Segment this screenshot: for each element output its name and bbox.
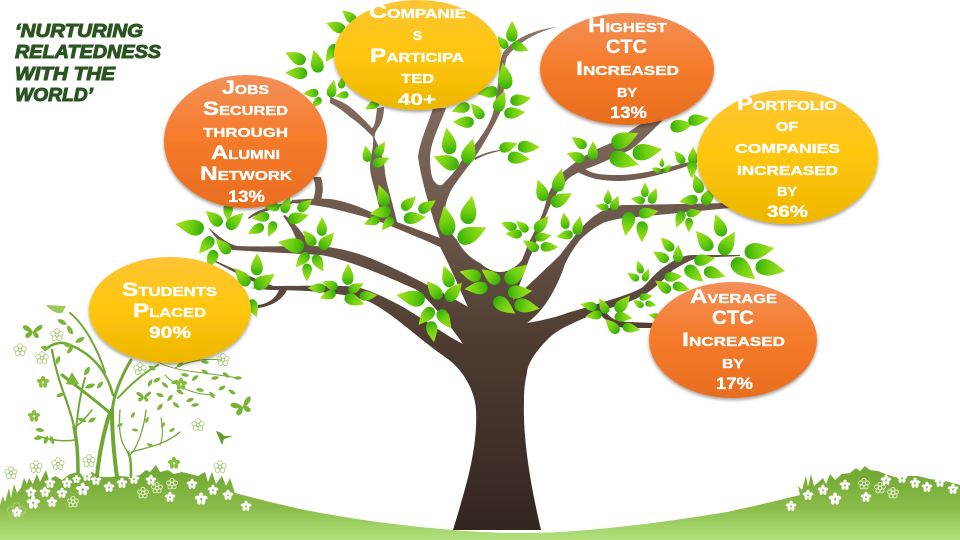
bubble: Companies Participated 40+: Participa bbox=[370, 46, 465, 67]
bubble: Highest CTC Increased by 13%: by bbox=[617, 81, 637, 102]
bubble: Portfolio of companies increased by 36%: by bbox=[777, 180, 797, 201]
bubble: Average CTC Increased by 17%: Average bbox=[690, 287, 777, 308]
bubble: Average CTC Increased by 17%: 17% bbox=[716, 374, 753, 393]
bubble: Average CTC Increased by 17%: CTC bbox=[712, 308, 754, 329]
small trees foliage, flowers and butterflies bbox=[5, 305, 255, 478]
tree bbox=[174, 7, 787, 530]
bubble: Portfolio of companies increased by 36%: increased bbox=[737, 159, 838, 180]
bubble: Students Placed 90% bbox=[89, 257, 251, 363]
bubble: Portfolio of companies increased by 36%: 36% bbox=[767, 202, 808, 221]
bubble: Companies Participated 40+ bbox=[334, 0, 501, 110]
bubble: Students Placed 90%: 90% bbox=[149, 323, 191, 342]
bubble: Highest CTC Increased by 13%: CTC bbox=[606, 37, 647, 58]
title: WITH THE bbox=[15, 64, 116, 84]
small green trees at left bbox=[38, 313, 238, 477]
bubble: Portfolio of companies increased by 36%: of bbox=[776, 115, 798, 136]
leaves bbox=[174, 7, 787, 343]
bubble: Jobs Secured through Alumni Network 13%: through bbox=[203, 121, 288, 142]
title bbox=[15, 21, 161, 105]
bubble: Jobs Secured through Alumni Network 13%: Network bbox=[200, 164, 293, 185]
bubble: Average CTC Increased by 17% bbox=[649, 282, 817, 398]
bubble: Highest CTC Increased by 13%: 13% bbox=[610, 103, 647, 122]
bubble: Jobs Secured through Alumni Network 13%: Jobs bbox=[222, 78, 269, 99]
bubble: Jobs Secured through Alumni Network 13% bbox=[164, 75, 327, 208]
title: RELATEDNESS bbox=[15, 42, 161, 62]
bubble: Portfolio of companies increased by 36% bbox=[697, 90, 878, 224]
title: WORLD’ bbox=[15, 85, 94, 105]
bubble: Highest CTC Increased by 13%: Highest bbox=[588, 16, 667, 37]
ground: hills with grass bbox=[0, 465, 960, 540]
bubble: Portfolio of companies increased by 36%: companies bbox=[735, 137, 840, 158]
title: ‘NURTURING bbox=[15, 21, 143, 41]
bubble: Companies Participated 40+: 40+ bbox=[398, 90, 436, 109]
trunk and branches bbox=[208, 27, 740, 530]
bubble: Average CTC Increased by 17%: Increased bbox=[682, 330, 785, 351]
bubble: Average CTC Increased by 17%: by bbox=[722, 352, 744, 373]
bubble: Companies Participated 40+: ted bbox=[401, 67, 434, 88]
bubble: Students Placed 90%: Students bbox=[122, 280, 217, 301]
bubble: Companies Participated 40+: Companie bbox=[369, 2, 466, 23]
bubble: Portfolio of companies increased by 36%: Portfolio bbox=[737, 94, 837, 115]
bubble: Companies Participated 40+: s bbox=[413, 24, 422, 45]
ground flowers bbox=[7, 471, 958, 520]
bubble: Jobs Secured through Alumni Network 13%: 13% bbox=[228, 187, 265, 206]
bubble: Highest CTC Increased by 13%: Increased bbox=[576, 59, 679, 80]
bubble: Students Placed 90%: Placed bbox=[133, 301, 206, 322]
bubble: Jobs Secured through Alumni Network 13%: Secured bbox=[203, 99, 288, 120]
bubble: Highest CTC Increased by 13% bbox=[540, 13, 714, 125]
bubble: Jobs Secured through Alumni Network 13%: Alumni bbox=[211, 143, 280, 164]
